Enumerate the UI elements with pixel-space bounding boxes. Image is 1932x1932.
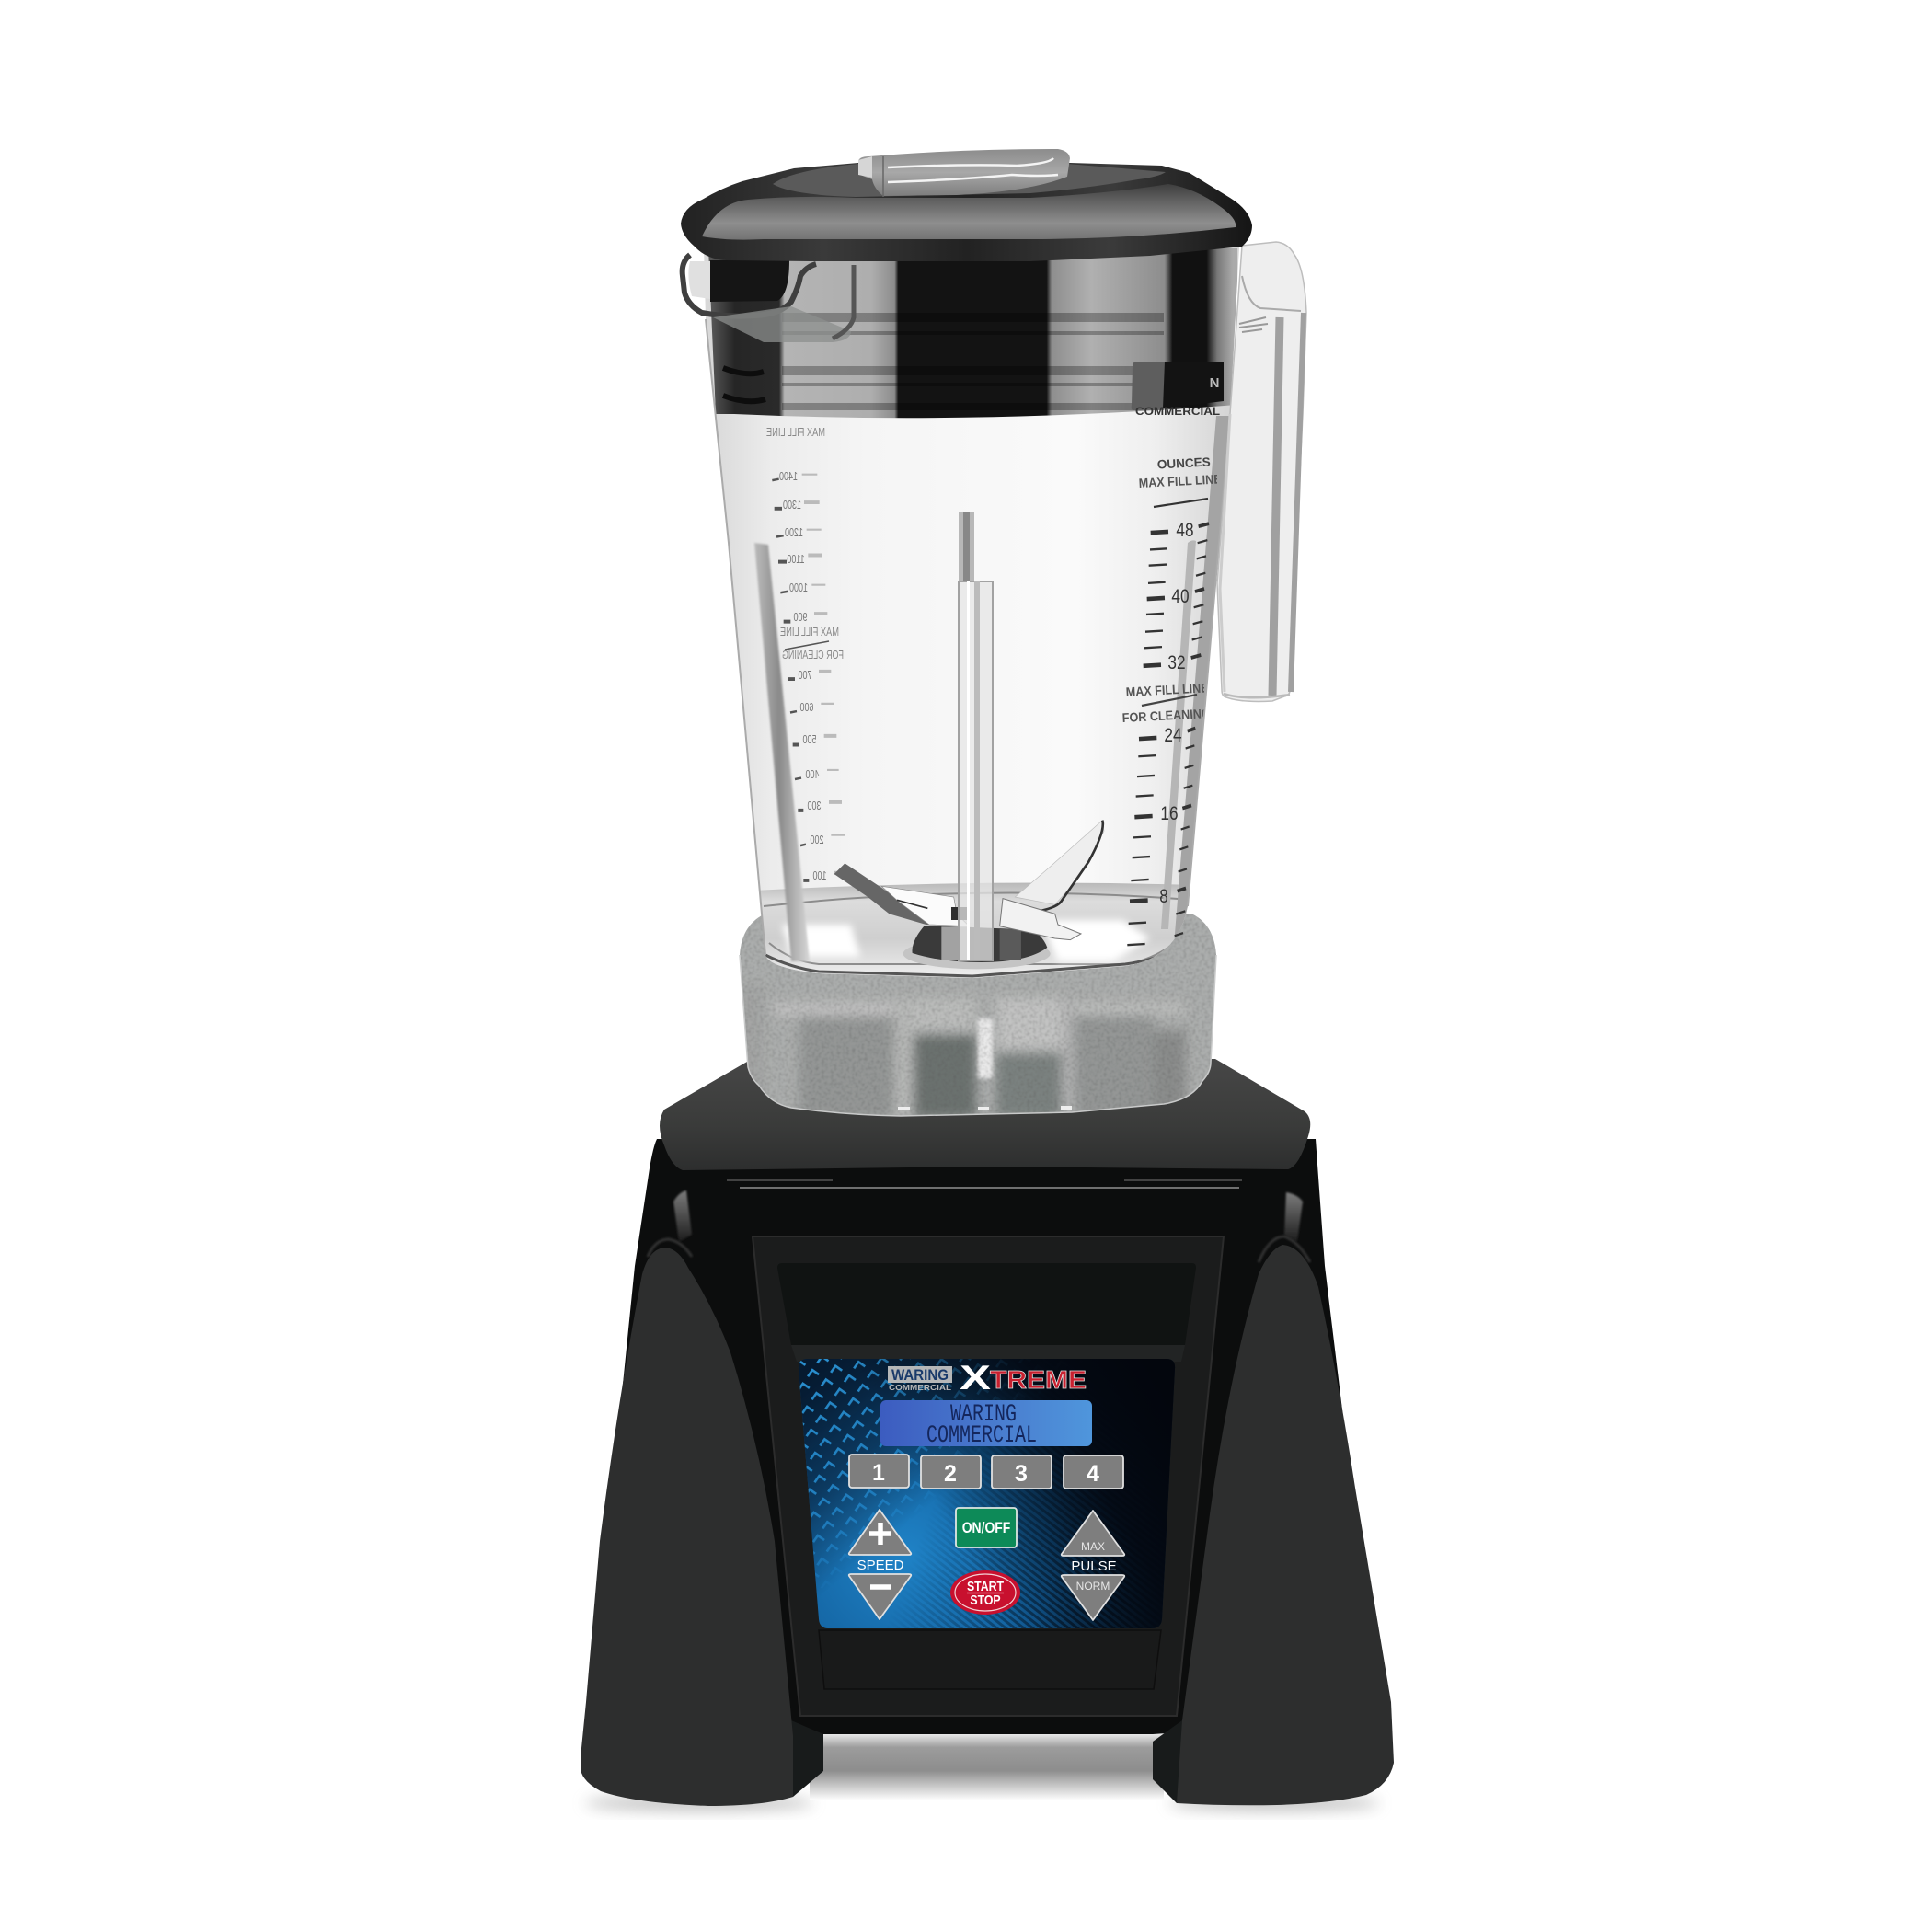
millilitre numbers: 500 xyxy=(802,734,817,746)
collar outline xyxy=(740,955,1216,1116)
pulse norm button xyxy=(1062,1575,1124,1620)
lower trim xyxy=(819,1630,1161,1689)
handle inner bands xyxy=(1272,317,1280,696)
cleaning max fill label: MAX FILL LINE xyxy=(1125,680,1209,699)
ounce numbers: 48 xyxy=(1176,521,1194,541)
LCD display: WARING xyxy=(950,1400,1017,1429)
preset button 3 xyxy=(992,1455,1052,1489)
cleaning rule xyxy=(1142,695,1197,706)
lid xyxy=(681,149,1252,261)
millilitre numbers: 1400 xyxy=(779,471,798,483)
right blade xyxy=(1000,821,1104,940)
max fill rule xyxy=(1154,499,1208,507)
blender base xyxy=(581,1139,1394,1806)
speed up button xyxy=(849,1510,911,1555)
LCD display xyxy=(880,1400,1092,1450)
blade assembly xyxy=(834,821,1104,969)
clear filler cap xyxy=(858,149,1070,197)
mirrored max fill label: MAX FILL LINE xyxy=(766,426,825,439)
collar feet lights xyxy=(898,1108,1072,1109)
millilitre numbers: 1300 xyxy=(783,500,801,512)
base floor xyxy=(760,883,1179,978)
floor reflections xyxy=(782,920,1150,961)
millilitre tick marks xyxy=(772,475,845,880)
ounce scale xyxy=(1121,455,1222,945)
mirrored for cleaning label: FOR CLEANING xyxy=(782,649,844,661)
jar rim outline xyxy=(706,319,1230,955)
control screen xyxy=(791,1352,1187,1638)
ounce heading: OUNCES xyxy=(1157,455,1211,472)
preset button 1: 1 xyxy=(872,1460,885,1486)
mirrored cleaning max fill label: MAX FILL LINE xyxy=(780,626,839,638)
millilitre numbers: 1000 xyxy=(789,582,808,594)
lid face xyxy=(702,184,1236,240)
on/off button: ON/OFF xyxy=(962,1520,1010,1536)
logo: Waring Commercial: WARING xyxy=(891,1366,949,1384)
right foot underside xyxy=(1153,1720,1196,1803)
spout xyxy=(683,255,854,342)
millilitre numbers: 1100 xyxy=(787,554,805,566)
handle marks xyxy=(1239,317,1268,332)
blade shaft xyxy=(959,512,993,960)
speed label: SPEED xyxy=(857,1558,904,1573)
on/off button xyxy=(956,1508,1017,1547)
logo: Xtreme: TREME xyxy=(990,1365,1087,1394)
logo: Waring Commercial xyxy=(888,1366,952,1392)
hood shading xyxy=(791,1345,1185,1362)
ounce numbers: 24 xyxy=(1164,726,1182,746)
preset button 2: 2 xyxy=(944,1461,957,1487)
ground shadow xyxy=(584,1734,1380,1811)
handle fold xyxy=(1242,276,1301,311)
panel bezel xyxy=(753,1236,1224,1716)
pulse max button xyxy=(1062,1511,1124,1556)
lid top recess xyxy=(773,164,1166,197)
upper recess xyxy=(777,1263,1196,1345)
preset button 2 xyxy=(921,1455,981,1489)
lid shell xyxy=(681,163,1252,261)
handle base edge xyxy=(1224,694,1290,697)
blade cone xyxy=(903,926,1051,969)
preset button 4: 4 xyxy=(1087,1461,1099,1487)
plug label xyxy=(1132,362,1224,418)
millilitre numbers: 700 xyxy=(798,670,812,682)
plug label: N xyxy=(1210,375,1219,391)
top max fill label: MAX FILL LINE xyxy=(1138,471,1222,490)
right wall streak xyxy=(1161,540,1196,929)
preset button 3: 3 xyxy=(1015,1461,1028,1487)
lower glass rim xyxy=(765,953,1156,977)
right side pad xyxy=(1177,1245,1394,1805)
pulse label: PULSE xyxy=(1071,1558,1117,1574)
plug label: COMMERCIAL xyxy=(1135,407,1220,418)
millilitre numbers: 100 xyxy=(812,870,827,882)
logo: Xtreme: X xyxy=(960,1359,991,1397)
for cleaning label: FOR CLEANING xyxy=(1121,706,1211,725)
left side pad xyxy=(581,1248,793,1806)
pad gloss xyxy=(648,1236,1310,1262)
ounce numbers: 40 xyxy=(1171,587,1190,607)
ounce numbers: 8 xyxy=(1159,887,1168,907)
logo: Xtreme xyxy=(960,1359,1087,1397)
start stop button: STOP xyxy=(970,1593,1001,1607)
start stop button: START xyxy=(967,1579,1005,1593)
left foot underside xyxy=(773,1720,823,1799)
base top pad xyxy=(660,1059,1310,1170)
blade hub xyxy=(951,907,969,920)
speed down button xyxy=(849,1574,911,1619)
frosted collar xyxy=(736,911,1224,1118)
product illustration: blender xyxy=(581,149,1394,1819)
handle left edge xyxy=(1220,414,1230,692)
millilitre numbers: 400 xyxy=(805,769,820,781)
start stop button xyxy=(950,1570,1020,1615)
left blade xyxy=(834,863,969,926)
control panel housing xyxy=(753,1236,1224,1716)
ounce numbers: 32 xyxy=(1167,653,1186,673)
floor rims xyxy=(764,892,1191,964)
screen background xyxy=(791,1352,1187,1638)
millilitre numbers: 600 xyxy=(799,702,814,714)
LCD display: COMMERCIAL xyxy=(926,1421,1037,1450)
ounce numbers xyxy=(1159,521,1194,907)
gloss highlights xyxy=(673,1180,1303,1242)
jar xyxy=(699,239,1251,984)
millilitre numbers: 300 xyxy=(807,800,822,812)
glass body xyxy=(699,239,1251,984)
millilitre numbers: 200 xyxy=(810,834,824,846)
preset button 4 xyxy=(1064,1455,1123,1489)
base body xyxy=(589,1139,1380,1734)
lid plug xyxy=(708,248,1237,418)
millilitre numbers xyxy=(779,471,827,882)
millilitre numbers: 900 xyxy=(793,612,808,624)
millilitre scale xyxy=(766,426,845,882)
pulse norm button: NORM xyxy=(1076,1580,1110,1593)
logo: Waring Commercial: COMMERCIAL xyxy=(889,1383,951,1392)
right wall band xyxy=(1173,416,1229,957)
millilitre numbers: 1200 xyxy=(785,527,803,539)
jar handle xyxy=(1217,242,1306,701)
ounce numbers: 16 xyxy=(1160,804,1179,824)
left wall band xyxy=(754,543,810,961)
mirrored cleaning rule xyxy=(785,641,829,650)
ounce tick marks xyxy=(1127,523,1209,945)
preset button 1 xyxy=(849,1455,909,1488)
pulse max button: MAX xyxy=(1081,1540,1105,1553)
